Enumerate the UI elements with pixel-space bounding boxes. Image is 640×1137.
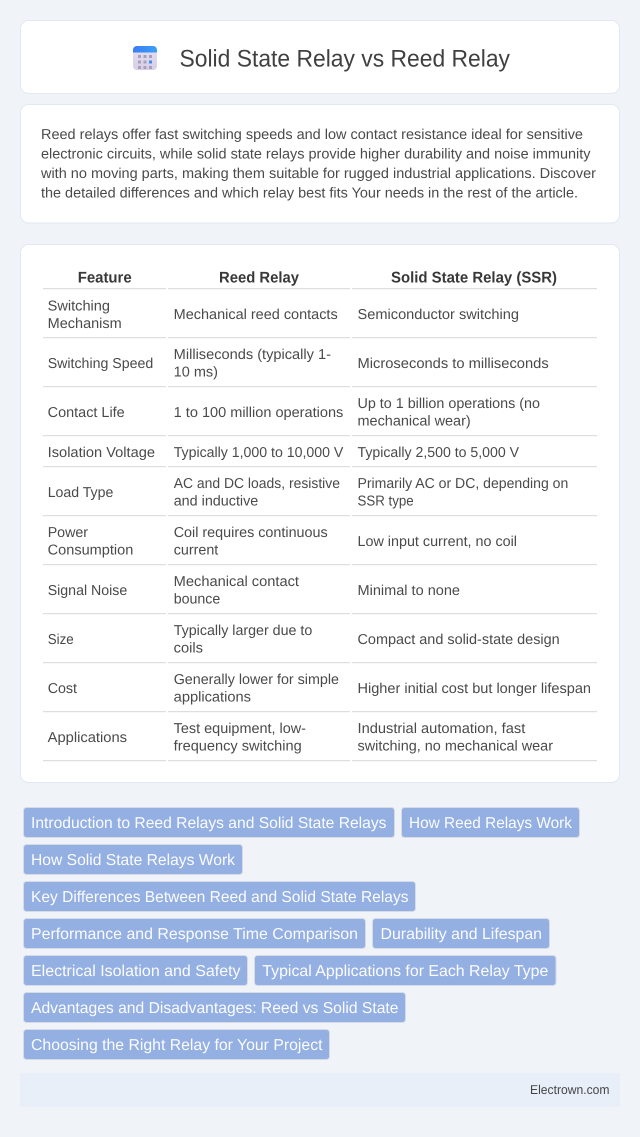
row: power consumption: current [174, 543, 218, 559]
footer [20, 1073, 620, 1107]
row: size: Typically larger due to [174, 623, 312, 639]
row: applications: switching, no mechanical wear [358, 739, 553, 755]
row: applications: Test equipment, low- [174, 721, 306, 737]
title: Solid State Relay vs Reed Relay [180, 46, 510, 72]
row: switching mechanism: Mechanical reed contacts [174, 307, 338, 323]
panel: intro paragraph [20, 104, 620, 223]
row: size: Compact and solid-state design [358, 632, 560, 648]
topic tags: Introduction to Reed Relays and Solid State Relays [31, 815, 387, 832]
panel: intro paragraph: with no moving parts, making them suitable for rugged industrial applications. Discover [40, 166, 596, 182]
row: applications [48, 721, 553, 755]
topic tags: Performance and Response Time Comparison [31, 926, 358, 943]
row: power consumption: Low input current, no coil [358, 534, 517, 550]
row: power consumption: Coil requires continuous [174, 525, 328, 541]
row: applications: Applications [48, 730, 127, 746]
topic tags: Electrical Isolation and Safety [31, 963, 241, 980]
panel: intro paragraph: Reed relays offer fast switching speeds and low contact resistance ideal for sensitive [41, 127, 583, 143]
row: load type: SSR type [358, 494, 414, 510]
row: size: Size [48, 632, 74, 648]
table header row: Solid State Relay (SSR) [391, 270, 557, 286]
row: switching speed: Milliseconds (typically 1- [174, 347, 331, 363]
topic tags: Advantages and Disadvantages: Reed vs Solid State [31, 1000, 399, 1017]
row: load type: Load Type [48, 485, 113, 501]
topic tags: Typical Applications for Each Relay Type [262, 963, 549, 980]
row: cost: applications [174, 690, 251, 706]
row: contact life: 1 to 100 million operations [174, 405, 343, 421]
footer: Electrown.com [530, 1082, 610, 1097]
row: size: coils [174, 641, 203, 657]
row: switching mechanism [48, 298, 519, 332]
row: contact life: Up to 1 billion operations (no [358, 396, 540, 412]
row: signal noise: Signal Noise [48, 583, 127, 599]
panel: intro paragraph: the detailed differences and which relay best fits Your needs in the rest of the article. [41, 186, 578, 202]
row: switching speed: Switching Speed [48, 356, 153, 372]
topic tags: How Solid State Relays Work [31, 852, 235, 869]
row: isolation voltage [48, 445, 519, 461]
row: switching speed: 10 ms) [174, 365, 218, 381]
row: contact life: mechanical wear) [358, 414, 471, 430]
row: load type [48, 476, 568, 510]
panel: intro paragraph: electronic circuits, while solid state relays provide higher durability and noise immunity [41, 146, 591, 162]
topic tags [24, 808, 580, 1060]
row: isolation voltage: Typically 2,500 to 5,000 V [358, 445, 519, 461]
row: signal noise: Mechanical contact [174, 574, 299, 590]
topic tags: Choosing the Right Relay for Your Project [31, 1037, 323, 1054]
panel: comparison table [20, 244, 620, 782]
row: signal noise: Minimal to none [358, 583, 460, 599]
row: contact life: Contact Life [48, 405, 125, 421]
row: isolation voltage: Typically 1,000 to 10,000 V [174, 445, 344, 461]
row: applications: frequency switching [174, 739, 302, 755]
row: cost: Cost [48, 681, 77, 697]
row: switching speed: Microseconds to milliseconds [358, 356, 549, 372]
row: power consumption: Power [48, 525, 88, 541]
table header row: Reed Relay [219, 270, 299, 286]
row: isolation voltage: Isolation Voltage [48, 445, 155, 461]
row: applications: Industrial automation, fast [358, 721, 525, 737]
row: cost [48, 672, 591, 706]
panel: title header [20, 20, 620, 94]
row: load type: AC and DC loads, resistive [174, 476, 340, 492]
row: switching speed [48, 347, 549, 381]
table header row [78, 270, 557, 286]
row: load type: and inductive [174, 494, 258, 510]
topic tags: How Reed Relays Work [409, 815, 572, 832]
row: switching mechanism: Switching [48, 298, 110, 314]
row: power consumption: Consumption [48, 543, 133, 559]
icon: calendar grid [133, 46, 157, 70]
row: cost: Generally lower for simple [174, 672, 339, 688]
row: signal noise: bounce [174, 592, 220, 608]
row: switching mechanism: Mechanism [48, 316, 122, 332]
topic tags: Key Differences Between Reed and Solid State Relays [31, 889, 409, 906]
table header row: Feature [78, 270, 132, 286]
row: load type: Primarily AC or DC, depending on [358, 476, 568, 492]
topic tags: Durability and Lifespan [380, 926, 542, 943]
row: power consumption [48, 525, 517, 559]
row: cost: Higher initial cost but longer lifespan [358, 681, 591, 697]
row: switching mechanism: Semiconductor switching [358, 307, 519, 323]
row: size [48, 623, 560, 657]
row: signal noise [48, 574, 460, 608]
row: contact life [48, 396, 540, 430]
